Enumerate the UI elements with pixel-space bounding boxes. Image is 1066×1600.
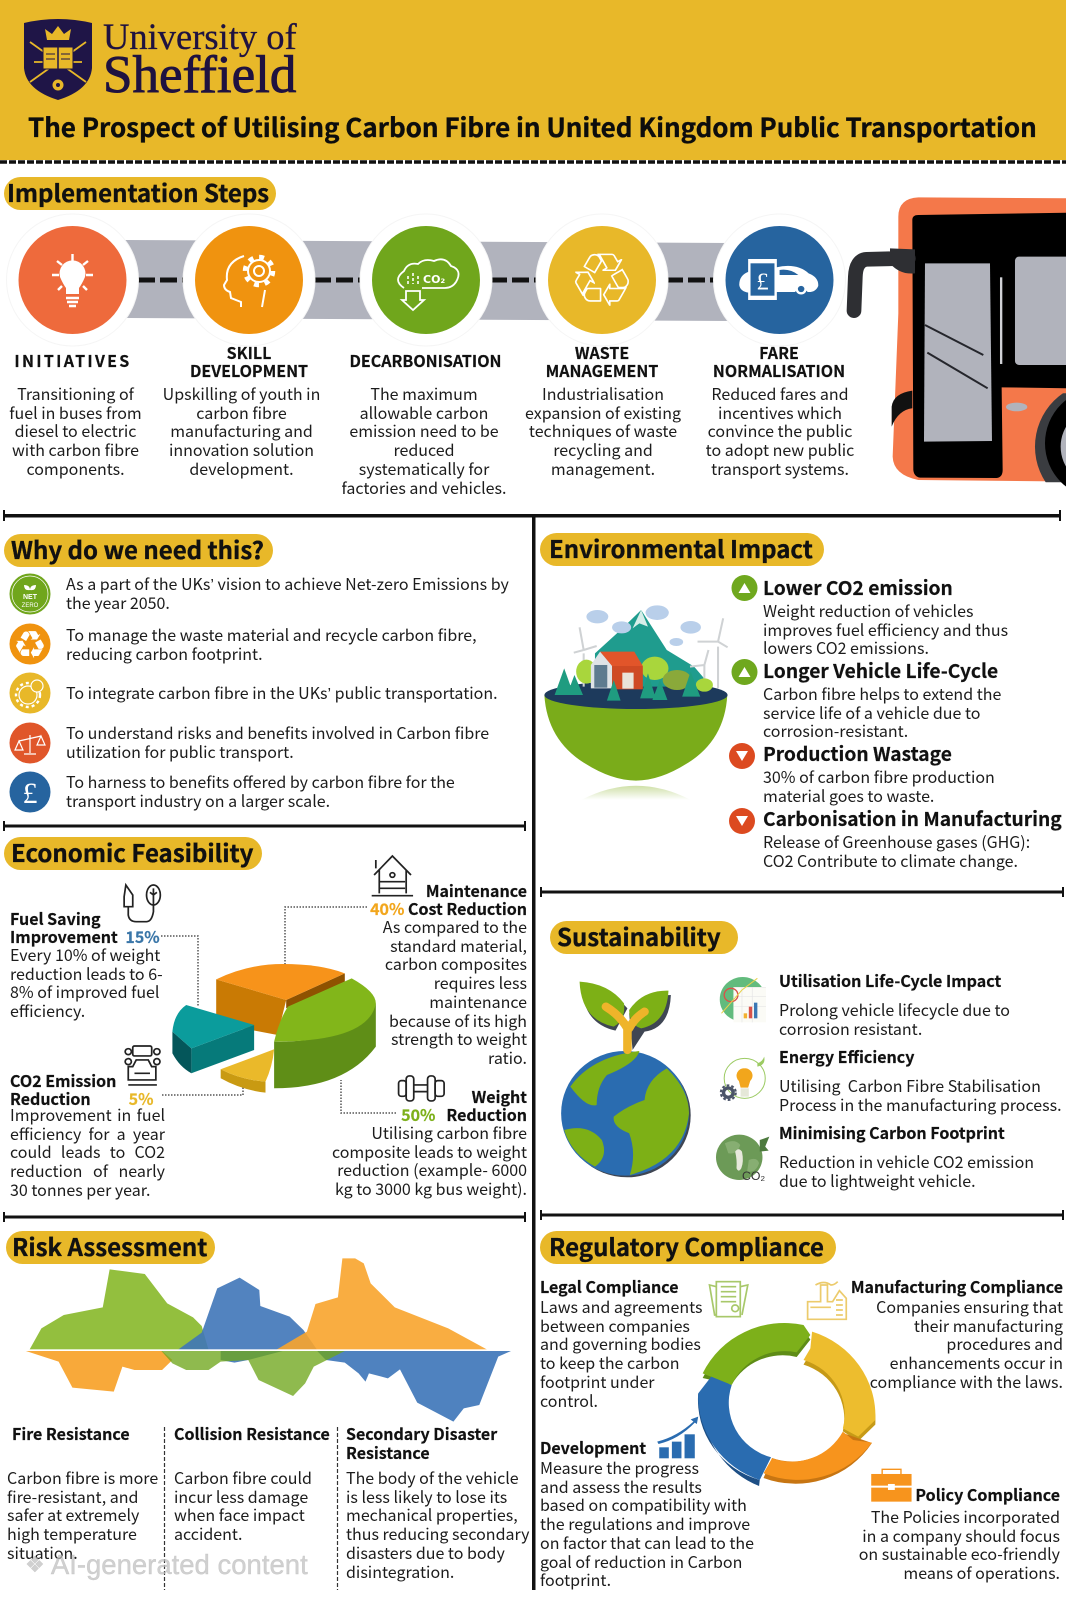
icon: net zero [10, 574, 50, 614]
manufacturing compliance body: Companies ensuring that their manufacturing procedures and enhancements occur in compliance with the laws. [870, 1294, 1063, 1393]
icon: net zero: ZERO [22, 603, 39, 609]
env heading 2: Longer Vehicle Life-Cycle [763, 656, 998, 684]
watermark: ❖ AI-generated content [25, 1549, 308, 1580]
step circle: waste management [536, 214, 668, 346]
policy compliance body: The Policies incorporated in a company should focus on sustainable eco-friendly means of operations. [859, 1504, 1060, 1584]
icon: gears [10, 672, 50, 714]
ring diagram [698, 1323, 875, 1486]
weight body: Utilising carbon fibre composite leads to weight reduction (example- 6000 kg to 3000 kg bus weight). [332, 1120, 527, 1200]
icon: up green second [732, 659, 758, 685]
step body: fare normalisation: Reduced fares and incentives which convince the public to adopt new public transport systems. [706, 381, 854, 480]
illustration: globe with sprout [561, 982, 691, 1177]
why text 5: To harness to benefits offered by carbon fibre for the transport industry on a larger scale. [66, 769, 455, 812]
maintenance body: As compared to the standard material, carbon composites requires less maintenance because of its high strength to weight ratio. [383, 914, 527, 1069]
header band [0, 0, 1066, 162]
logo wordmark: University of [103, 16, 297, 57]
fire resistance body: Carbon fibre is more fire-resistant, and safer at extremely high temperature situation. [7, 1465, 158, 1564]
divider: horizontal steps [3, 510, 1061, 521]
title: The Prospect of Utilising Carbon Fibre in United Kingdom Public Transportation [28, 108, 1037, 145]
icon: co2 car [125, 1046, 160, 1085]
co2 emission body: 30 tonnes per year. [10, 1177, 150, 1201]
step circle: decarbonisation [360, 214, 492, 346]
heading: risk assessment: Risk Assessment [12, 1228, 207, 1263]
fuel saving heading: Fuel Saving Improvement 15% [10, 906, 160, 948]
icon: legal document [709, 1282, 748, 1317]
icon: up green [732, 575, 758, 601]
env body 2: Carbon fibre helps to extend the service life of a vehicle due to corrosion-resistant. [763, 681, 1001, 742]
icon: scales [10, 722, 50, 764]
secondary disaster heading: Secondary Disaster Resistance [346, 1421, 497, 1464]
icon: fuel pump and leaf [124, 885, 160, 922]
env heading 4: Carbonisation in Manufacturing [763, 804, 1062, 832]
step circle: fare normalisation: £ [756, 269, 769, 295]
icon: rising bars [657, 1417, 698, 1458]
fuel saving body: Every 10% of weight reduction leads to 6- 8% of improved fuel efficiency. [10, 942, 163, 1022]
pie chart [172, 964, 376, 1093]
step heading: initiatives: INITIATIVES [14, 348, 132, 372]
icon: pound [10, 772, 50, 812]
step circle: decarbonisation: CO₂ [423, 273, 445, 286]
step heading: waste management: WASTE MANAGEMENT [546, 340, 658, 382]
divider: environmental [540, 887, 1064, 897]
icon: briefcase [871, 1469, 912, 1502]
step circle: initiatives [6, 214, 138, 346]
co2 emission heading: CO2 Emission Reduction 5% [10, 1068, 153, 1110]
icon: energy bulb [721, 1057, 765, 1100]
co2 emission body: reduction of nearly [10, 1158, 165, 1182]
why text 4: To understand risks and benefits involved in Carbon fibre utilization for public transport. [66, 720, 489, 763]
co2 emission body: could leads to CO2 [10, 1139, 165, 1163]
why text 1: As a part of the UKs’ vision to achieve Net-zero Emissions by the year 2050. [66, 571, 509, 614]
sustainability heading 3: Minimising Carbon Footprint [779, 1120, 1005, 1144]
why text 3: To integrate carbon fibre in the UKs’ public transportation. [66, 680, 498, 704]
icon: university crest [24, 19, 92, 100]
icon: down red [729, 743, 755, 769]
divider: economic [3, 1212, 526, 1222]
manufacturing compliance heading: Manufacturing Compliance [851, 1274, 1063, 1298]
icon: down red second [729, 808, 755, 834]
divider: why [3, 821, 526, 831]
sustainability body 1: Prolong vehicle lifecycle due to corrosion resistant. [779, 997, 1010, 1040]
divider: vertical centre [532, 516, 536, 1590]
secondary disaster body: The body of the vehicle is less likely to lose its mechanical properties, thus reducing secondary disasters due to body disintegration. [346, 1465, 530, 1583]
logo wordmark [103, 16, 297, 104]
step heading: decarbonisation: DECARBONISATION [349, 348, 502, 372]
weight heading: Weight 50% Reduction [401, 1084, 527, 1126]
step body: waste management: Industrialisation expansion of existing techniques of waste recycling and management. [525, 381, 681, 480]
sustainability body 2: Utilising Carbon Fibre Stabilisation Process in the manufacturing process. [779, 1073, 1062, 1116]
icon: factory [808, 1282, 846, 1319]
icon: pound: £ [22, 777, 38, 810]
heading: environmental impact: Environmental Impact [549, 530, 813, 565]
co2 emission body: Improvement in fuel [10, 1102, 165, 1126]
step circle: waste management: ♻ [570, 238, 634, 322]
heading: regulatory compliance: Regulatory Compliance [549, 1228, 824, 1263]
heading: sustainability: Sustainability [557, 918, 721, 953]
logo wordmark: Sheffield [103, 46, 296, 104]
illustration: floating island [544, 605, 728, 800]
collision resistance body: Carbon fibre could incur less damage when face impact accident. [174, 1465, 312, 1545]
step body: initiatives: Transitioning of fuel in buses from diesel to electric with carbon fibre components. [9, 381, 142, 480]
co2 emission body [10, 1102, 165, 1201]
icon: carbon footprint: CO₂ [742, 1169, 765, 1183]
heading: why do we need this: Why do we need this? [11, 531, 264, 566]
env heading 3: Production Wastage [763, 739, 952, 767]
step circle: fare normalisation [714, 214, 846, 346]
step body: skill development: Upskilling of youth in carbon fibre manufacturing and innovation solution development. [163, 381, 320, 480]
sustainability heading 2: Energy Efficiency [779, 1044, 914, 1068]
road band [122, 240, 732, 321]
dotted leader lines [161, 907, 396, 1113]
icon: recycle: ♻ [13, 623, 47, 667]
icon: net zero: NET [23, 594, 38, 601]
env body 1: Weight reduction of vehicles improves fuel efficiency and thus lowers CO2 emissions. [763, 598, 1008, 659]
sustainability heading 1: Utilisation Life-Cycle Impact [779, 968, 1001, 992]
column dashes [164, 1427, 338, 1590]
sustainability body 3: Reduction in vehicle CO2 emission due to lightweight vehicle. [779, 1149, 1034, 1192]
development body: Measure the progress and assess the results based on compatibility with the regulations and improve on factor that can lead to the goal of reduction in Carbon footprint. [540, 1455, 754, 1591]
icon: maintenance house [372, 856, 413, 896]
maintenance heading: Maintenance 40% Cost Reduction [370, 878, 527, 920]
env body 4: Release of Greenhouse gases (GHG): CO2 Contribute to climate change. [763, 829, 1030, 872]
fire resistance heading: Fire Resistance [12, 1421, 130, 1445]
icon: carbon footprint [716, 1135, 769, 1183]
co2 emission body: efficiency for a year [10, 1121, 165, 1145]
legal compliance body: Laws and agreements between companies and governing bodies to keep the carbon footprint under control. [540, 1294, 702, 1412]
legal compliance heading: Legal Compliance [540, 1274, 679, 1298]
step circle: skill development [183, 214, 315, 346]
bus illustration [854, 197, 1066, 512]
why text 2: To manage the waste material and recycle carbon fibre, reducing carbon footprint. [66, 622, 477, 665]
icon: dumbbell [399, 1076, 444, 1101]
heading: economic feasibility: Economic Feasibility [11, 834, 253, 869]
divider: sustainability [540, 1210, 1064, 1220]
step body: decarbonisation: The maximum allowable carbon emission need to be reduced systematically for factories and vehicles. [342, 381, 506, 499]
icon: life-cycle chart [720, 977, 766, 1022]
heading: implementation steps: Implementation Steps [7, 174, 269, 209]
development heading: Development [540, 1435, 646, 1459]
collision resistance heading: Collision Resistance [174, 1421, 330, 1445]
env body 3: 30% of carbon fibre production material goes to waste. [763, 764, 995, 807]
policy compliance heading: Policy Compliance [915, 1482, 1060, 1506]
area chart: risk assessment [26, 1258, 511, 1422]
env heading 1: Lower CO2 emission [763, 573, 953, 601]
step heading: fare normalisation: FARE NORMALISATION [713, 340, 845, 382]
step heading: skill development: SKILL DEVELOPMENT [190, 340, 308, 382]
